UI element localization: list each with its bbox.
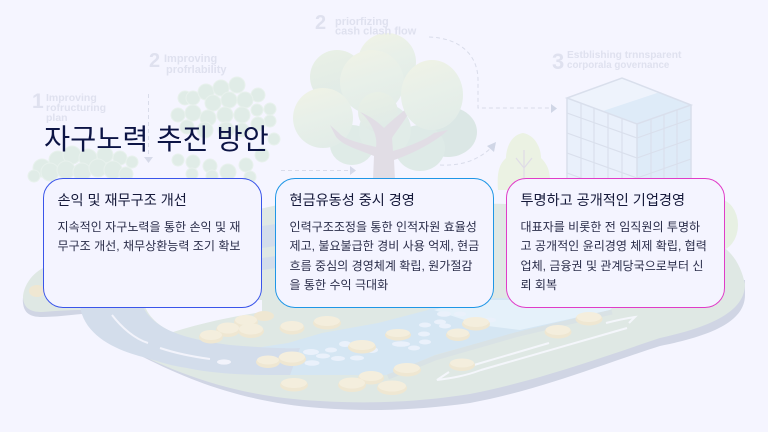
label: step 1: rofructuring bbox=[46, 102, 106, 114]
arrow: dashed right bbox=[281, 166, 356, 175]
label: step 3: corporala governance bbox=[567, 60, 670, 71]
trunk bbox=[330, 103, 448, 180]
ground platform bbox=[23, 199, 745, 410]
water channel bbox=[255, 298, 622, 375]
panel body text: 뢰 회복 bbox=[520, 278, 557, 292]
panel body text: 제고, 불요불급한 경비 사용 억제, 현금 bbox=[290, 239, 479, 253]
title: 자구노력 추진 방안 bbox=[44, 124, 269, 156]
panel body text: 고 공개적인 윤리경영 체제 확립, 협력 bbox=[520, 239, 707, 253]
road markings bbox=[112, 315, 210, 359]
label: step 2 cash flow: priorfizing bbox=[335, 16, 389, 28]
arrow: dashed curve to building bbox=[429, 37, 557, 113]
coin tree center bbox=[171, 77, 280, 183]
label: step 3: Estblishing trnnsparent bbox=[567, 50, 682, 61]
panel body text: 무구조 개선, 채무상환능력 조기 확보 bbox=[58, 239, 240, 253]
gold coins bbox=[29, 285, 602, 395]
small tree bbox=[498, 133, 550, 190]
panel body text bbox=[290, 220, 479, 292]
panel body text: 흐름 중심의 경영체계 확립, 원가절감 bbox=[290, 259, 472, 273]
coin tree left bbox=[28, 146, 138, 182]
label: step 3: 3 bbox=[552, 49, 564, 74]
label: step 1: 1 bbox=[32, 90, 44, 113]
inner loop clearing bbox=[143, 300, 262, 332]
label: step 1: plan bbox=[46, 112, 68, 124]
arrowhead bbox=[487, 142, 496, 152]
label: step 2 improving: profrlability bbox=[166, 64, 227, 76]
arrow: dashed down bbox=[144, 94, 153, 163]
panel: 현금유동성 중시 경영 bbox=[275, 178, 494, 308]
right white arrows bbox=[437, 317, 635, 380]
arrow: tree to tree bbox=[440, 148, 491, 165]
label: step 2 cash flow: 2 bbox=[315, 12, 326, 34]
label: step 1 bbox=[32, 90, 106, 124]
large tree bbox=[293, 33, 491, 180]
panel body text: 대표자를 비롯한 전 임직원의 투명하 bbox=[520, 220, 700, 234]
label: step 2 cash flow: cash clash flow bbox=[335, 26, 417, 38]
road bbox=[80, 306, 300, 375]
panel: 손익 및 재무구조 개선 bbox=[43, 178, 262, 308]
panel: 투명하고 공개적인 기업경영 bbox=[506, 178, 724, 308]
label: step 2 improving bbox=[149, 50, 227, 76]
panel body text: 지속적인 자구노력을 통한 손익 및 재 bbox=[58, 220, 240, 234]
label: step 2 improving: 2 bbox=[149, 50, 160, 72]
label: step 2 improving: Improving bbox=[164, 53, 217, 65]
panel heading: 손익 및 재무구조 개선 bbox=[58, 193, 187, 209]
panel heading: 현금유동성 중시 경영 bbox=[290, 193, 415, 209]
panel body text bbox=[58, 220, 240, 253]
water bubbles bbox=[303, 311, 496, 366]
building bbox=[567, 78, 691, 250]
label: step 2 cash flow bbox=[315, 12, 417, 38]
label: step 1: Improving bbox=[46, 92, 97, 104]
label: step 3 bbox=[552, 49, 682, 74]
panel body text bbox=[520, 220, 707, 292]
panel body text: 인력구조조정을 통한 인적자원 효율성 bbox=[290, 220, 477, 234]
hill right bbox=[698, 199, 738, 251]
panel heading: 투명하고 공개적인 기업경영 bbox=[520, 193, 685, 209]
panel body text: 업체, 금융권 및 관계당국으로부터 신 bbox=[520, 259, 703, 273]
panel body text: 을 통한 수익 극대화 bbox=[290, 278, 388, 292]
